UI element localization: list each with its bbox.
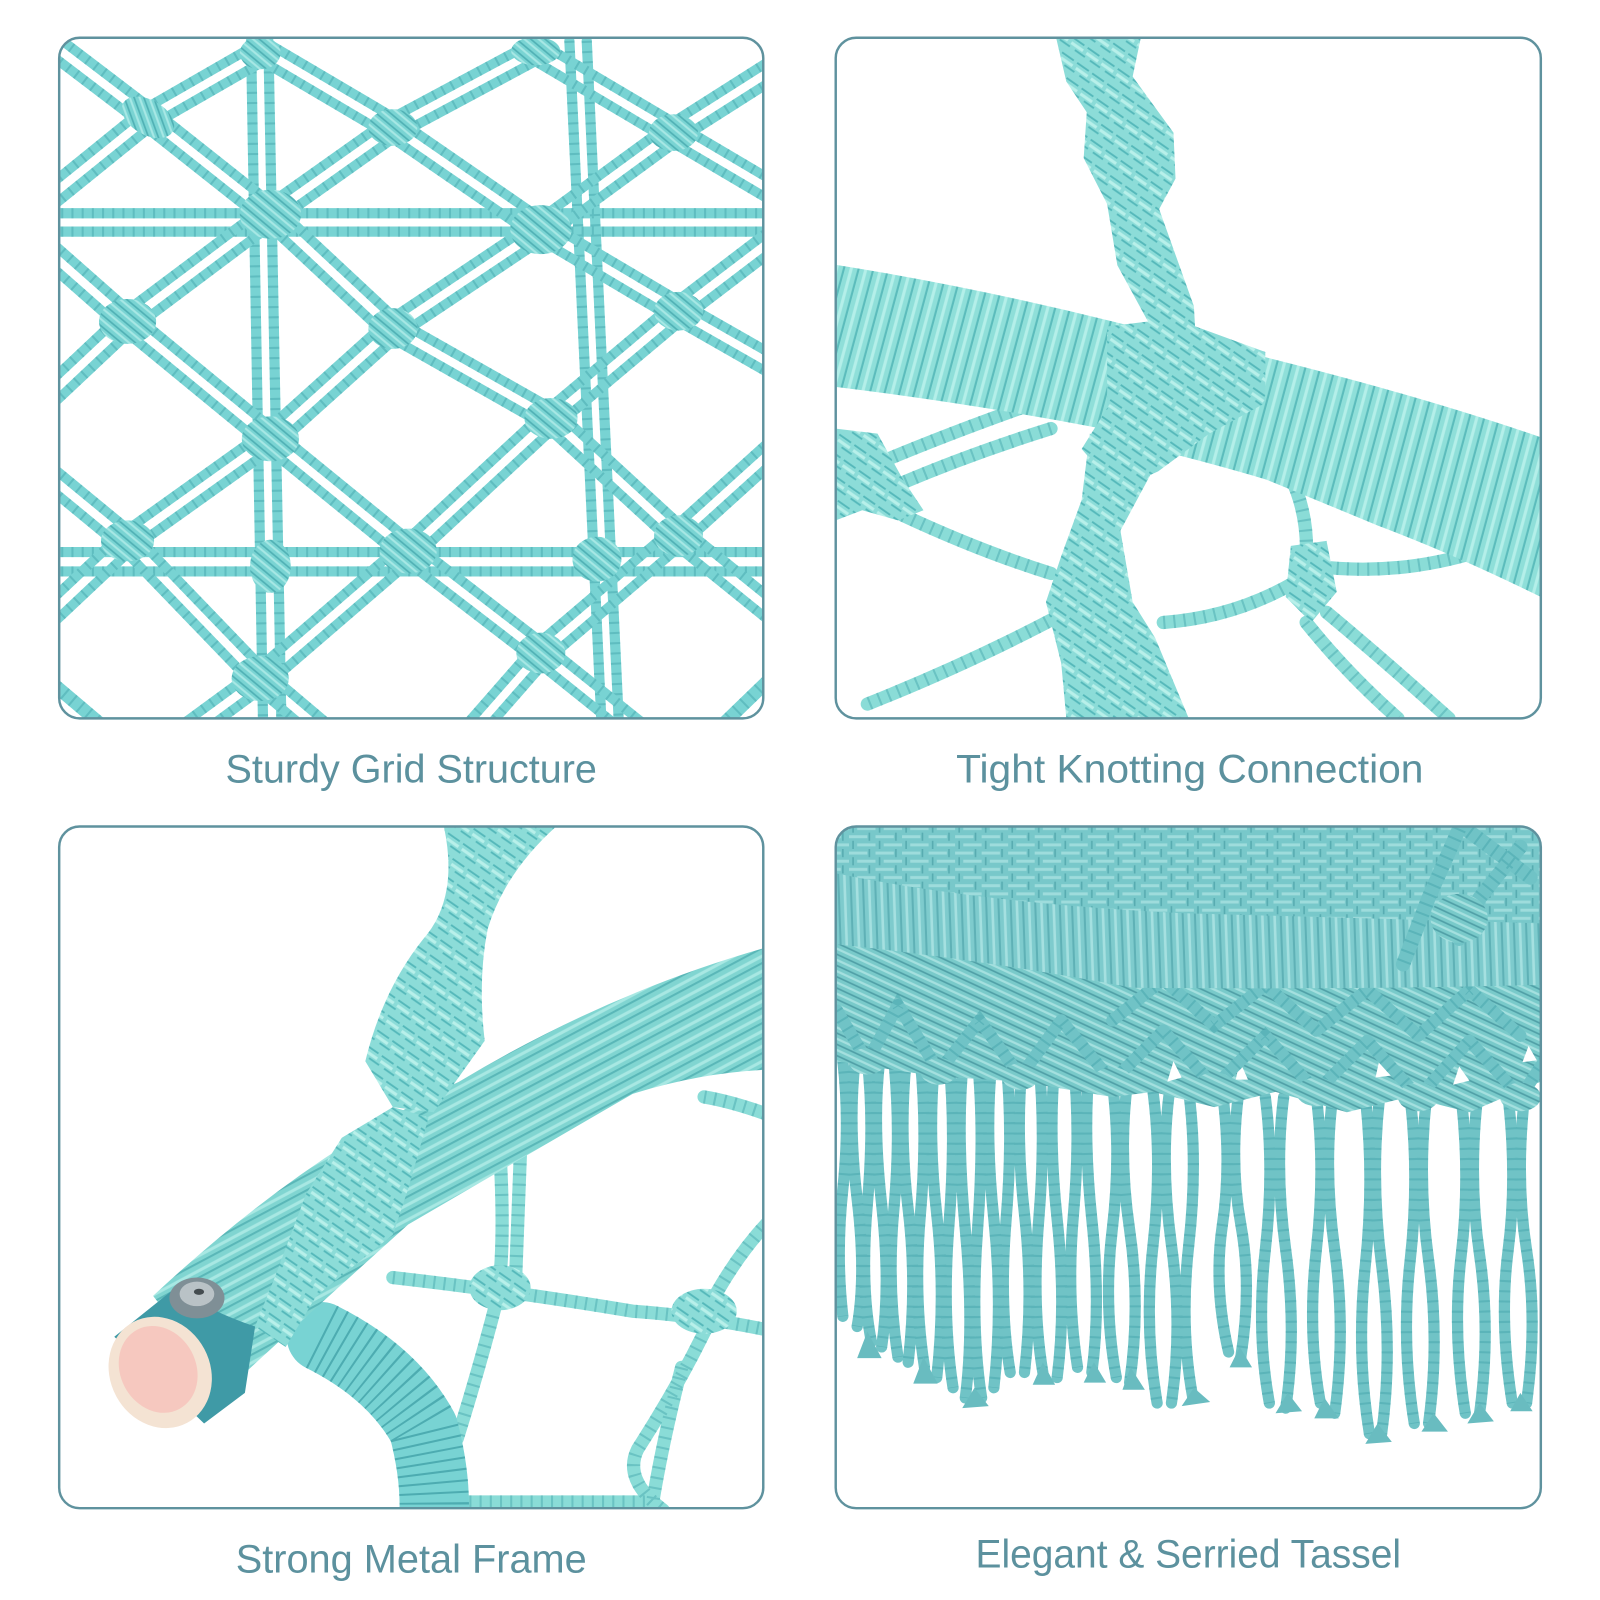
caption: Elegant & Serried Tassel — [976, 1532, 1401, 1576]
rope knots — [99, 37, 703, 701]
fringe ropes — [839, 1061, 1532, 1434]
left knot cluster — [836, 429, 923, 520]
panel: Tight Knotting Connection — [827, 38, 1551, 792]
panel: Sturdy Grid Structure — [35, 29, 791, 792]
caption: Strong Metal Frame — [236, 1537, 587, 1581]
tassel ends — [857, 1332, 1533, 1444]
frame — [59, 38, 763, 718]
photo: tassel fringe — [832, 827, 1551, 1444]
caption: Sturdy Grid Structure — [226, 748, 597, 792]
metal frame tube — [827, 263, 1551, 602]
central knot — [1082, 322, 1266, 475]
lower trunk — [1046, 434, 1189, 718]
hanging rope — [1403, 829, 1531, 964]
top braid — [1056, 38, 1196, 342]
panel: Elegant & Serried Tassel — [832, 827, 1551, 1576]
photo: knotted rope on frame — [827, 38, 1551, 718]
ring band — [832, 872, 1546, 988]
caption: Tight Knotting Connection — [956, 748, 1423, 792]
photo: rope grid — [60, 39, 762, 718]
right knot — [1286, 541, 1337, 622]
braid — [255, 827, 556, 1347]
woven seat top — [836, 827, 1541, 929]
frame — [836, 827, 1541, 1508]
knotted lattice — [836, 939, 1551, 1112]
photo: frame end and braid — [89, 827, 776, 1520]
net strands — [321, 1097, 776, 1520]
end cap — [108, 1278, 255, 1428]
frame — [59, 827, 763, 1508]
net strands — [867, 408, 1480, 718]
metal frame tube — [153, 945, 776, 1390]
panel: Strong Metal Frame — [59, 827, 776, 1581]
frame — [836, 38, 1541, 718]
